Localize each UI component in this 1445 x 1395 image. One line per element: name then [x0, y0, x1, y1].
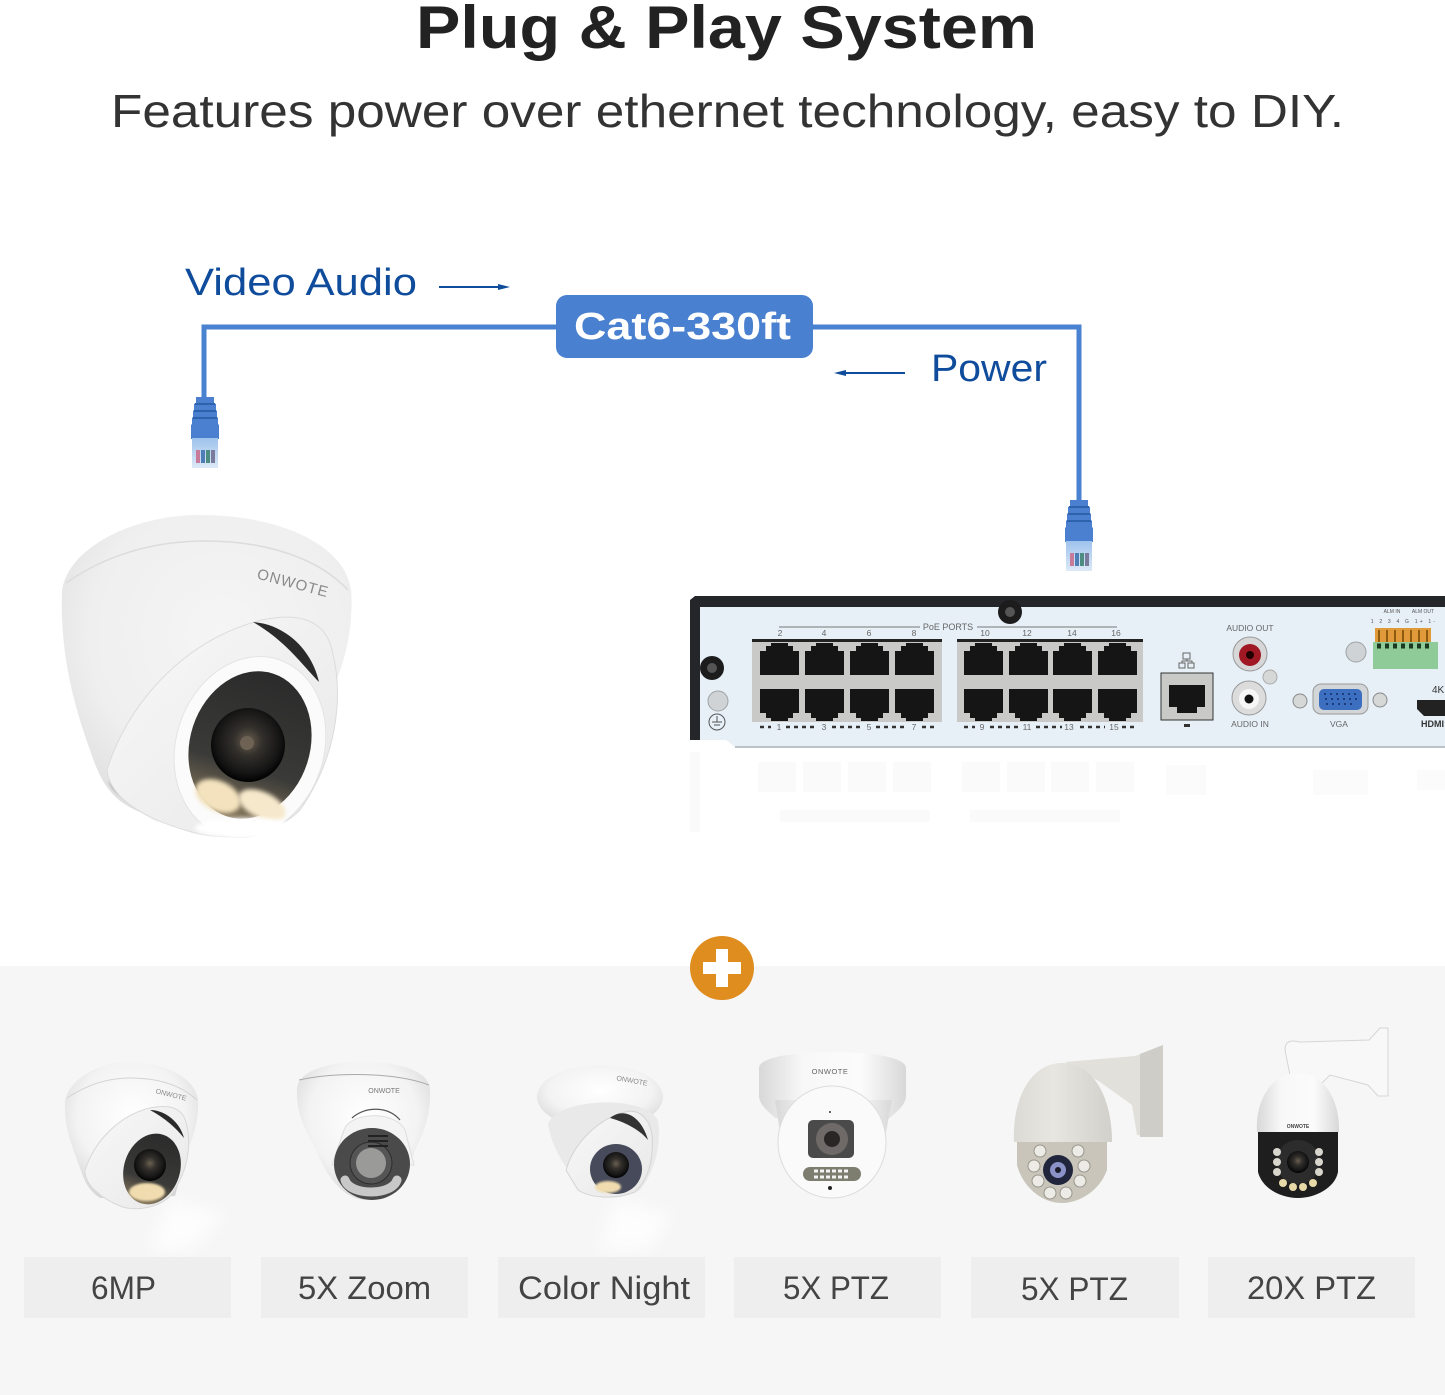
label: 6MP: 6MP: [91, 1270, 156, 1306]
cable label pill: Cat6-330ft: [574, 306, 791, 348]
label: 5X PTZ: [734, 1257, 941, 1318]
product: 5X zoom dome: [297, 1062, 430, 1200]
label: Color Night: [498, 1257, 705, 1318]
PoE labels: 12: [1022, 628, 1032, 638]
PoE labels: 15: [1109, 722, 1119, 732]
label: 20X PTZ: [1208, 1257, 1415, 1318]
label: 5X Zoom: 5X Zoom: [298, 1270, 431, 1306]
icon: recorder side RJ45 connector: [1065, 500, 1093, 571]
label: 5X Zoom: [261, 1257, 468, 1318]
PoE port group left: [752, 639, 942, 722]
product: 5X PTZ turret: [759, 1052, 906, 1198]
PoE labels: 16: [1111, 628, 1121, 638]
subtitle: Features power over ethernet technology, easy to DIY.: [111, 85, 1344, 137]
product: 5X zoom dome: ONWOTE: [368, 1088, 400, 1095]
icon: orange plus: [690, 936, 754, 1000]
label: power: Power: [931, 348, 1047, 390]
label: 5X PTZ: 5X PTZ: [783, 1270, 889, 1306]
PoE labels: 9: [980, 722, 985, 732]
label: 5X PTZ second: 5X PTZ: [1021, 1271, 1128, 1307]
cable: [204, 327, 1079, 504]
PoE labels: 1: [777, 722, 782, 732]
product: 20X PTZ black dome: ONWOTE: [1287, 1124, 1310, 1130]
PoE labels: 4: [822, 628, 827, 638]
PoE labels: 3: [822, 722, 827, 732]
alarm terminal block: ALM IN: [1384, 609, 1401, 615]
LAN port: [1161, 653, 1213, 727]
PoE port group right: [957, 639, 1143, 722]
audio out jack: [1226, 623, 1274, 671]
PoE labels: 2: [778, 628, 783, 638]
PoE labels: 14: [1067, 628, 1077, 638]
bottom accessory panel: [0, 966, 1445, 1395]
recorder body: [700, 607, 1445, 747]
PoE labels: PoE PORTS: [923, 622, 973, 632]
HDMI port: [1417, 685, 1445, 729]
product: colour night dome: ONWOTE: [616, 1075, 648, 1088]
label: 6MP: [24, 1257, 231, 1318]
cable label pill: [556, 295, 813, 358]
screws: [700, 600, 1366, 730]
audio in jack: [1231, 681, 1269, 729]
product: 6MP dome: [65, 1062, 225, 1250]
label: 20X PTZ: 20X PTZ: [1247, 1270, 1376, 1306]
alarm terminal block: ALM OUT: [1412, 609, 1434, 615]
alarm terminal block: [1371, 609, 1438, 669]
PoE labels: 8: [912, 628, 917, 638]
label: video audio: Video Audio: [185, 262, 417, 304]
product: 20X PTZ black dome: [1257, 1028, 1388, 1198]
network video recorder rear panel: [690, 596, 1445, 747]
product: 6MP dome: ONWOTE: [155, 1088, 187, 1103]
PoE labels: 5: [867, 722, 872, 732]
product: 5X PTZ turret: ONWOTE: [812, 1067, 848, 1076]
recorder reflection: [690, 752, 1445, 832]
PoE labels: [760, 622, 1136, 732]
PoE labels: 11: [1023, 722, 1032, 732]
product: 5X PTZ grey dome: [1014, 1045, 1163, 1203]
label: 5X PTZ second: [971, 1257, 1179, 1318]
PoE labels: 10: [980, 628, 990, 638]
HDMI port: 4K: [1432, 685, 1445, 696]
PoE labels: 6: [867, 628, 872, 638]
VGA port: VGA: [1330, 719, 1348, 729]
PoE labels: 13: [1064, 722, 1074, 732]
arrow: video audio direction: [439, 284, 510, 290]
arrow: power direction: [834, 370, 905, 376]
product: colour night dome: [537, 1065, 670, 1250]
label: Color Night: Color Night: [518, 1270, 690, 1306]
audio in jack: AUDIO IN: [1231, 719, 1269, 729]
recorder frame: [690, 596, 1445, 740]
audio out jack: AUDIO OUT: [1226, 623, 1274, 633]
HDMI port: HDMI: [1421, 719, 1444, 729]
main dome camera: [62, 515, 352, 857]
icon: camera side RJ45 connector: [191, 397, 219, 468]
camera brand text: ONWOTE: [255, 566, 331, 601]
PoE labels: 7: [912, 722, 917, 732]
alarm terminal block: 1 2 3 4 G 1+ 1-: [1371, 619, 1437, 625]
VGA port: [1293, 684, 1387, 729]
